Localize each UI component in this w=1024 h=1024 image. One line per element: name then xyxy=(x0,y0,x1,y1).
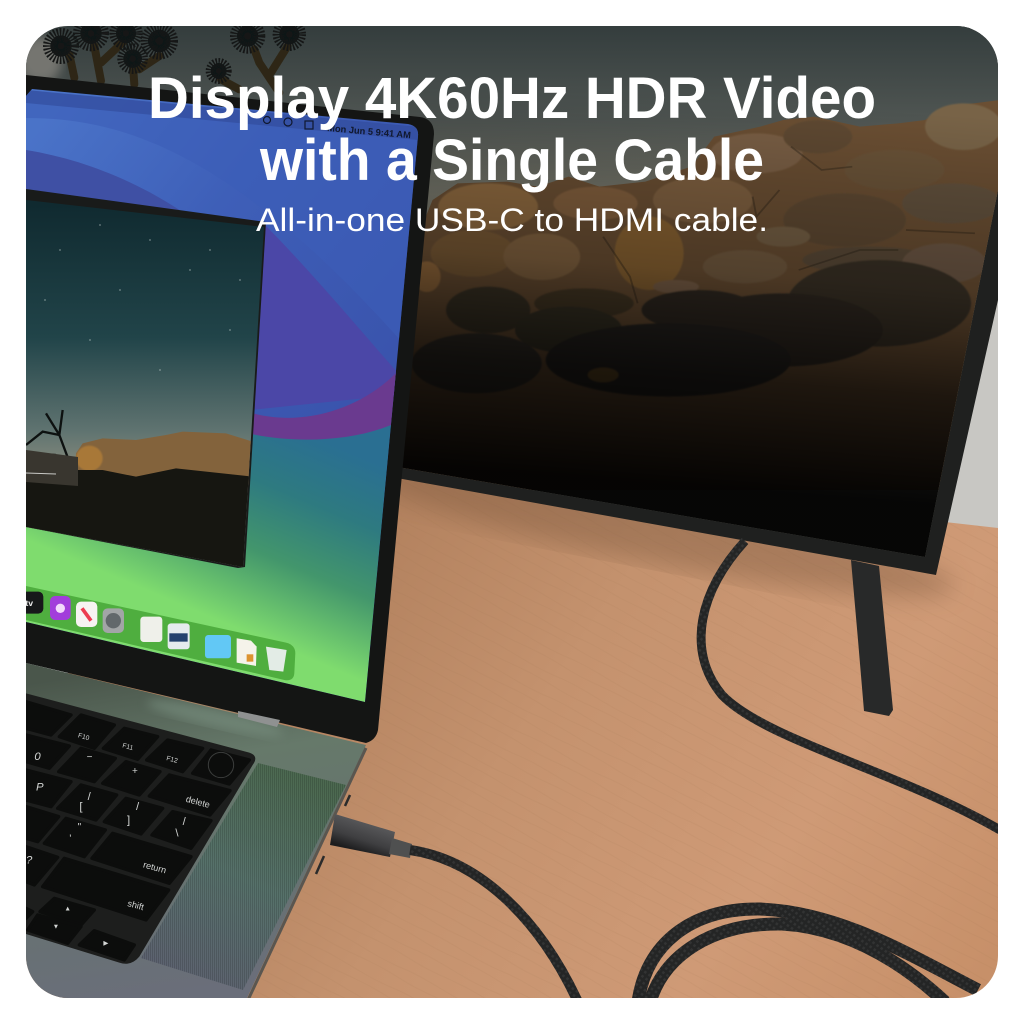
upper left sky and Joshua trees xyxy=(26,26,380,113)
laptop side edge xyxy=(248,748,366,1000)
key labels: ? xyxy=(26,854,33,866)
key labels: / xyxy=(183,816,187,828)
rock cracks xyxy=(603,147,975,303)
rock formation, drawn in 600x300 crop coordinates xyxy=(400,98,1013,490)
menu bar icons xyxy=(264,116,313,129)
key labels: return xyxy=(142,860,167,875)
photo window xyxy=(26,189,266,573)
keyboard, drawn in 350x340 crop coordinates xyxy=(26,693,255,964)
key labels: [ xyxy=(79,801,83,813)
laptop keyboard deck xyxy=(26,663,366,998)
key labels: / xyxy=(88,791,92,803)
key labels: ▼ xyxy=(53,923,59,930)
window tree xyxy=(26,410,68,457)
wallpaper waves xyxy=(26,150,400,395)
laptop hinge xyxy=(238,711,280,727)
USB-C cable xyxy=(410,850,578,1002)
dock and icons, drawn in 400x300 crop coordinates: tv xyxy=(25,598,33,608)
USB-C connector xyxy=(330,814,412,858)
key labels: F10 xyxy=(77,732,90,742)
key labels: − xyxy=(87,752,93,763)
coiled cable xyxy=(638,909,978,1002)
headline line 1: Display 4K60Hz HDR Video xyxy=(148,66,876,131)
subheading: All-in-one USB-C to HDMI cable. xyxy=(256,202,768,238)
HDMI cable xyxy=(701,541,1000,830)
key labels xyxy=(26,732,211,947)
video control bar xyxy=(26,450,78,486)
laptop display xyxy=(19,85,426,710)
deck screen reflection xyxy=(149,698,278,736)
key labels: ▶ xyxy=(103,940,109,947)
wall background xyxy=(26,26,998,546)
side ports xyxy=(316,795,350,874)
power button xyxy=(208,752,234,778)
key labels: ▲ xyxy=(64,906,71,913)
menu bar xyxy=(26,90,420,140)
key labels: 0 xyxy=(34,751,41,763)
wooden desk surface xyxy=(26,439,998,998)
monitor frame xyxy=(380,26,998,575)
key labels: P xyxy=(36,782,44,794)
key labels: ' xyxy=(69,834,71,845)
key labels: " xyxy=(78,822,82,833)
dock and icons, drawn in 400x300 crop coordinates xyxy=(19,586,295,680)
monitor stand leg xyxy=(851,560,893,716)
headline xyxy=(148,66,876,193)
key labels: / xyxy=(136,801,140,813)
monitor screen photo xyxy=(380,26,1013,580)
key labels: delete xyxy=(185,794,211,810)
speaker grille xyxy=(141,763,346,990)
key labels: ] xyxy=(127,814,130,826)
monitor xyxy=(380,26,1013,580)
laptop lid xyxy=(26,75,434,743)
window landscape, in crop coordinates xyxy=(26,410,253,573)
key labels: + xyxy=(132,766,138,777)
key labels: F12 xyxy=(165,755,179,765)
wallpaper green field xyxy=(26,425,391,702)
menu clock: Mon Jun 5 9:41 AM xyxy=(327,123,411,140)
dark foreground gradient xyxy=(402,124,998,557)
key labels: \ xyxy=(175,828,179,840)
key labels: shift xyxy=(126,898,145,912)
wallpaper purple band xyxy=(248,372,397,440)
headline line 2: with a Single Cable xyxy=(259,128,764,193)
key labels: F11 xyxy=(121,742,134,752)
